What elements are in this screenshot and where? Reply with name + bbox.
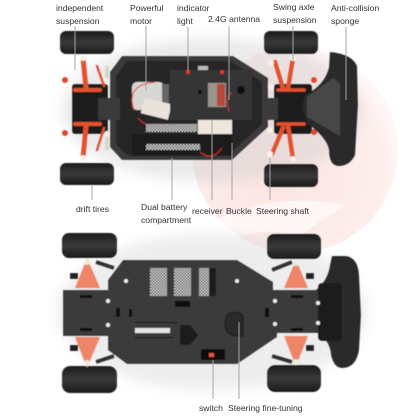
tires: bottom view [62, 233, 321, 393]
steering fine-tuning dial [225, 312, 243, 336]
anti-collision sponge: bottom view [316, 256, 361, 368]
label: switch: switch [199, 403, 223, 413]
label: swing axle suspension: suspension [273, 15, 317, 25]
battery compartment [132, 124, 232, 156]
label: dual battery compartment: Dual battery [141, 202, 187, 212]
label: drift tires: drift tires [76, 204, 109, 214]
label: powerful motor: Powerful [130, 3, 163, 13]
label: independent suspension: independent [56, 3, 103, 13]
labels [56, 2, 379, 413]
label: 2.4G antenna: 2.4G antenna [208, 14, 260, 24]
suspension front and rear [62, 55, 317, 162]
label: buckle: Buckle [226, 206, 252, 216]
white connector [198, 120, 232, 137]
tires: top view [60, 31, 318, 187]
label: receiver: receiver [192, 206, 223, 216]
anti-collision sponge bumper [303, 52, 358, 166]
label: steering shaft: Steering shaft [256, 206, 310, 216]
bumper mount [307, 78, 340, 136]
suspension arms: bottom view [70, 258, 314, 368]
chassis vents and holes [80, 268, 320, 345]
top view car chassis [60, 31, 362, 187]
receiver box [170, 66, 252, 120]
label: indicator light: indicator [177, 3, 209, 13]
label: independent suspension: suspension [56, 16, 100, 26]
label: anti-collision sponge: sponge [331, 16, 359, 26]
switch [201, 349, 225, 360]
label: indicator light: light [177, 16, 193, 26]
chassis plate top [110, 56, 268, 160]
label: anti-collision sponge: Anti-collision [331, 3, 379, 13]
label: swing axle suspension: Swing axle [273, 2, 315, 12]
watermark: pale red circle [192, 47, 398, 253]
motor [132, 82, 210, 128]
leader lines [75, 26, 346, 399]
label: steering fine-tuning: Steering fine-tuning [228, 403, 303, 413]
label: dual battery compartment: compartment [141, 215, 192, 225]
bumper mount: bottom view [318, 283, 342, 341]
label: powerful motor: motor [130, 16, 152, 26]
chassis plate bottom [63, 260, 318, 364]
bottom view car chassis [57, 233, 367, 393]
